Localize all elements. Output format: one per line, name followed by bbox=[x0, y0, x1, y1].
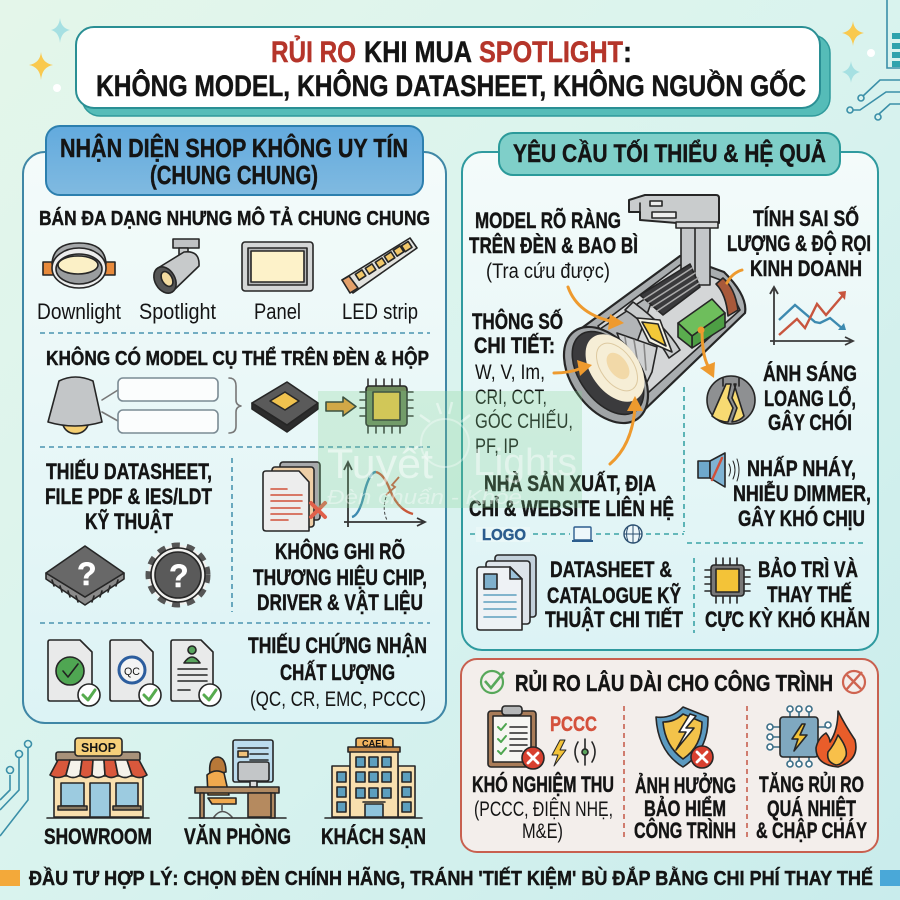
text: clear model: MODEL RÕ RÀNG bbox=[475, 208, 621, 233]
text: missing certification: THIẾU CHỨNG NHẬN bbox=[248, 633, 427, 658]
text: missing datasheet: THIẾU DATASHEET, bbox=[46, 459, 212, 484]
text: unclear chip brand: THƯƠNG HIỆU CHIP, bbox=[253, 565, 427, 590]
icon: showroom bbox=[47, 738, 149, 818]
text: detailed parameters: CRI, CCT, bbox=[475, 386, 547, 409]
icon: personal certificate bbox=[171, 640, 221, 706]
text: clear model: TRÊN ĐÈN & BAO BÌ bbox=[469, 233, 638, 258]
icon: broken shield bbox=[656, 707, 713, 768]
watermark: Lights bbox=[473, 442, 577, 484]
icon: document stack bbox=[477, 555, 536, 630]
panel heading bbox=[499, 133, 840, 175]
labels: product types: LED strip bbox=[342, 299, 418, 324]
text: uneven light: GÂY CHÓI bbox=[768, 410, 852, 435]
text: missing certification bbox=[248, 633, 427, 711]
subheading: no model: KHÔNG CÓ MODEL CỤ THỂ TRÊN ĐÈN & HỘP bbox=[46, 346, 429, 370]
text: missing certification: CHẤT LƯỢNG bbox=[280, 660, 395, 685]
icon: hotel: CAEL bbox=[362, 738, 388, 748]
title: KHI MUA bbox=[364, 36, 472, 69]
icon: LED strip bbox=[342, 238, 417, 293]
text: missing certification: (QC, CR, EMC, PCCC) bbox=[250, 687, 426, 711]
icon: speaker bbox=[698, 453, 739, 487]
text: error calculation bbox=[727, 205, 871, 281]
icon: uneven light bbox=[707, 376, 755, 424]
text: affects insurance: CÔNG TRÌNH bbox=[634, 818, 736, 843]
text: overheating risk bbox=[756, 772, 867, 843]
text: affects insurance: BẢO HIỂM bbox=[644, 796, 726, 821]
icon: downlight bbox=[43, 243, 115, 288]
icon: chip unknown: ? bbox=[77, 556, 97, 592]
text: unclear chip brand bbox=[253, 539, 427, 615]
heading: long-term risks: RỦI RO LÂU DÀI CHO CÔNG TRÌNH bbox=[515, 668, 833, 696]
text: missing datasheet: KỸ THUẬT bbox=[85, 509, 173, 534]
text: overheating risk: QUÁ NHIỆT bbox=[767, 796, 856, 821]
text: hard to accept: M&E) bbox=[522, 820, 563, 843]
labels: building types: KHÁCH SẠN bbox=[321, 824, 426, 849]
panel heading: YÊU CẦU TỐI THIỂU & HỆ QUẢ bbox=[513, 138, 826, 168]
text: error calculation: TÍNH SAI SỐ bbox=[753, 205, 859, 231]
text: manufacturer contact: NHÀ SẢN XUẤT, ĐỊA bbox=[484, 471, 656, 496]
text: manufacturer contact bbox=[469, 471, 674, 521]
text: unclear chip brand: KHÔNG GHI RÕ bbox=[275, 539, 405, 564]
icon: certificate check bbox=[48, 640, 100, 706]
text: affects insurance bbox=[634, 773, 736, 843]
decoration: circuit bottom left bbox=[0, 740, 32, 836]
decoration: sparkles and circuit top bbox=[29, 0, 900, 120]
text: datasheet and catalogue: CATALOGUE KỸ bbox=[547, 583, 681, 608]
text: flicker: GÂY KHÓ CHỊU bbox=[738, 506, 865, 531]
text: missing datasheet: FILE PDF & IES/LDT bbox=[45, 484, 212, 509]
labels: building types bbox=[44, 824, 426, 849]
text: detailed parameters: CHI TIẾT: bbox=[474, 333, 555, 358]
icon: lamp with blank labels bbox=[48, 377, 241, 434]
panel: long-term project risks bbox=[461, 659, 878, 852]
title: : bbox=[623, 36, 632, 69]
text: detailed parameters: W, V, Im, bbox=[475, 361, 545, 384]
text: hard to accept bbox=[472, 772, 614, 843]
labels: building types: SHOWROOM bbox=[44, 824, 152, 849]
text: hard to accept: KHÓ NGHIỆM THU bbox=[472, 772, 614, 797]
text: error calculation: KINH DOANH bbox=[750, 256, 862, 281]
text: difficult maintenance bbox=[705, 557, 870, 632]
text: datasheet and catalogue: DATASHEET & bbox=[550, 557, 672, 582]
watermark: Đèn chuẩn - Khỏe bbox=[327, 487, 522, 509]
subheading: generic descriptions: BÁN ĐA DẠNG NHƯNG MÔ TẢ CHUNG CHUNG bbox=[39, 206, 430, 230]
icon: chip unknown bbox=[46, 546, 124, 605]
watermark: Tuyết bbox=[327, 440, 433, 487]
text: clear model: (Tra cứu được) bbox=[486, 259, 610, 283]
icon: check circle bbox=[481, 671, 504, 693]
title bbox=[76, 27, 830, 116]
text: detailed parameters: GÓC CHIẾU, bbox=[475, 410, 573, 433]
title: SPOTLIGHT bbox=[479, 36, 623, 69]
icon: unclear document bbox=[263, 462, 325, 531]
labels: product types: Panel bbox=[254, 299, 301, 324]
labels: product types bbox=[37, 299, 418, 324]
text: difficult maintenance: THAY THẾ bbox=[767, 582, 852, 607]
text: flicker bbox=[733, 456, 871, 531]
icon: cross circle bbox=[843, 671, 865, 693]
text: uneven light: ÁNH SÁNG bbox=[763, 361, 857, 386]
text: detailed parameters: PF, IP bbox=[475, 435, 519, 458]
text: datasheet and catalogue bbox=[545, 557, 683, 632]
icon: hotel bbox=[325, 738, 422, 818]
icon: clipboard with PCCC: PCCC bbox=[550, 713, 597, 736]
text: difficult maintenance: BẢO TRÌ VÀ bbox=[758, 557, 858, 582]
icon: spotlight bbox=[149, 239, 199, 297]
text: affects insurance: ẢNH HƯỞNG bbox=[635, 773, 736, 798]
text: detailed parameters bbox=[472, 308, 573, 458]
panel heading bbox=[46, 126, 423, 195]
arrows: pointers to spotlight parts bbox=[554, 270, 742, 464]
text: unclear chip brand: DRIVER & VẬT LIỆU bbox=[257, 590, 423, 615]
text: hard to accept: (PCCC, ĐIỆN NHẸ, bbox=[474, 798, 613, 821]
icon: logo laptop globe row bbox=[476, 525, 642, 544]
watermark bbox=[318, 391, 582, 509]
text: datasheet and catalogue: THUẬT CHI TIẾT bbox=[545, 607, 683, 632]
labels: building types: VĂN PHÒNG bbox=[184, 824, 291, 849]
icon: gear unknown bbox=[148, 545, 208, 605]
title: RỦI RO bbox=[271, 35, 356, 69]
icon: QC certificate: QC bbox=[124, 666, 140, 678]
icon: chip to chip arrow bbox=[252, 379, 413, 433]
text: flicker: NHIỄU DIMMER, bbox=[733, 480, 871, 506]
chart: trend lines bbox=[770, 287, 853, 345]
chart: broken curve bbox=[344, 462, 425, 527]
text: flicker: NHẤP NHÁY, bbox=[747, 456, 856, 481]
icon: panel light bbox=[242, 242, 313, 291]
text: uneven light bbox=[763, 361, 857, 435]
text: uneven light: LOANG LỔ, bbox=[764, 386, 856, 411]
icon: office bbox=[189, 740, 286, 818]
panel: minimum requirements and consequences bbox=[462, 133, 878, 650]
icon: overheating chip and flame bbox=[767, 706, 856, 767]
panel heading: (CHUNG CHUNG) bbox=[150, 160, 318, 190]
text: manufacturer contact: CHỈ & WEBSITE LIÊN HỆ bbox=[469, 496, 674, 521]
icon: chip bbox=[705, 558, 750, 603]
icon: logo laptop globe row: LOGO bbox=[482, 527, 526, 544]
icon: gear unknown: ? bbox=[169, 558, 189, 594]
text: clear model bbox=[469, 208, 638, 283]
icon: clipboard with PCCC bbox=[488, 706, 597, 769]
panel: identify untrustworthy shops bbox=[23, 126, 446, 723]
text: detailed parameters: THÔNG SỐ bbox=[472, 308, 563, 334]
panel heading: NHẬN DIỆN SHOP KHÔNG UY TÍN bbox=[60, 133, 408, 163]
icon: showroom: SHOP bbox=[81, 740, 116, 755]
labels: product types: Spotlight bbox=[139, 299, 216, 324]
text: missing datasheet bbox=[45, 459, 212, 534]
icon: QC certificate bbox=[110, 640, 161, 706]
illustration: cutaway spotlight bbox=[547, 195, 745, 439]
labels: product types: Downlight bbox=[37, 299, 121, 324]
